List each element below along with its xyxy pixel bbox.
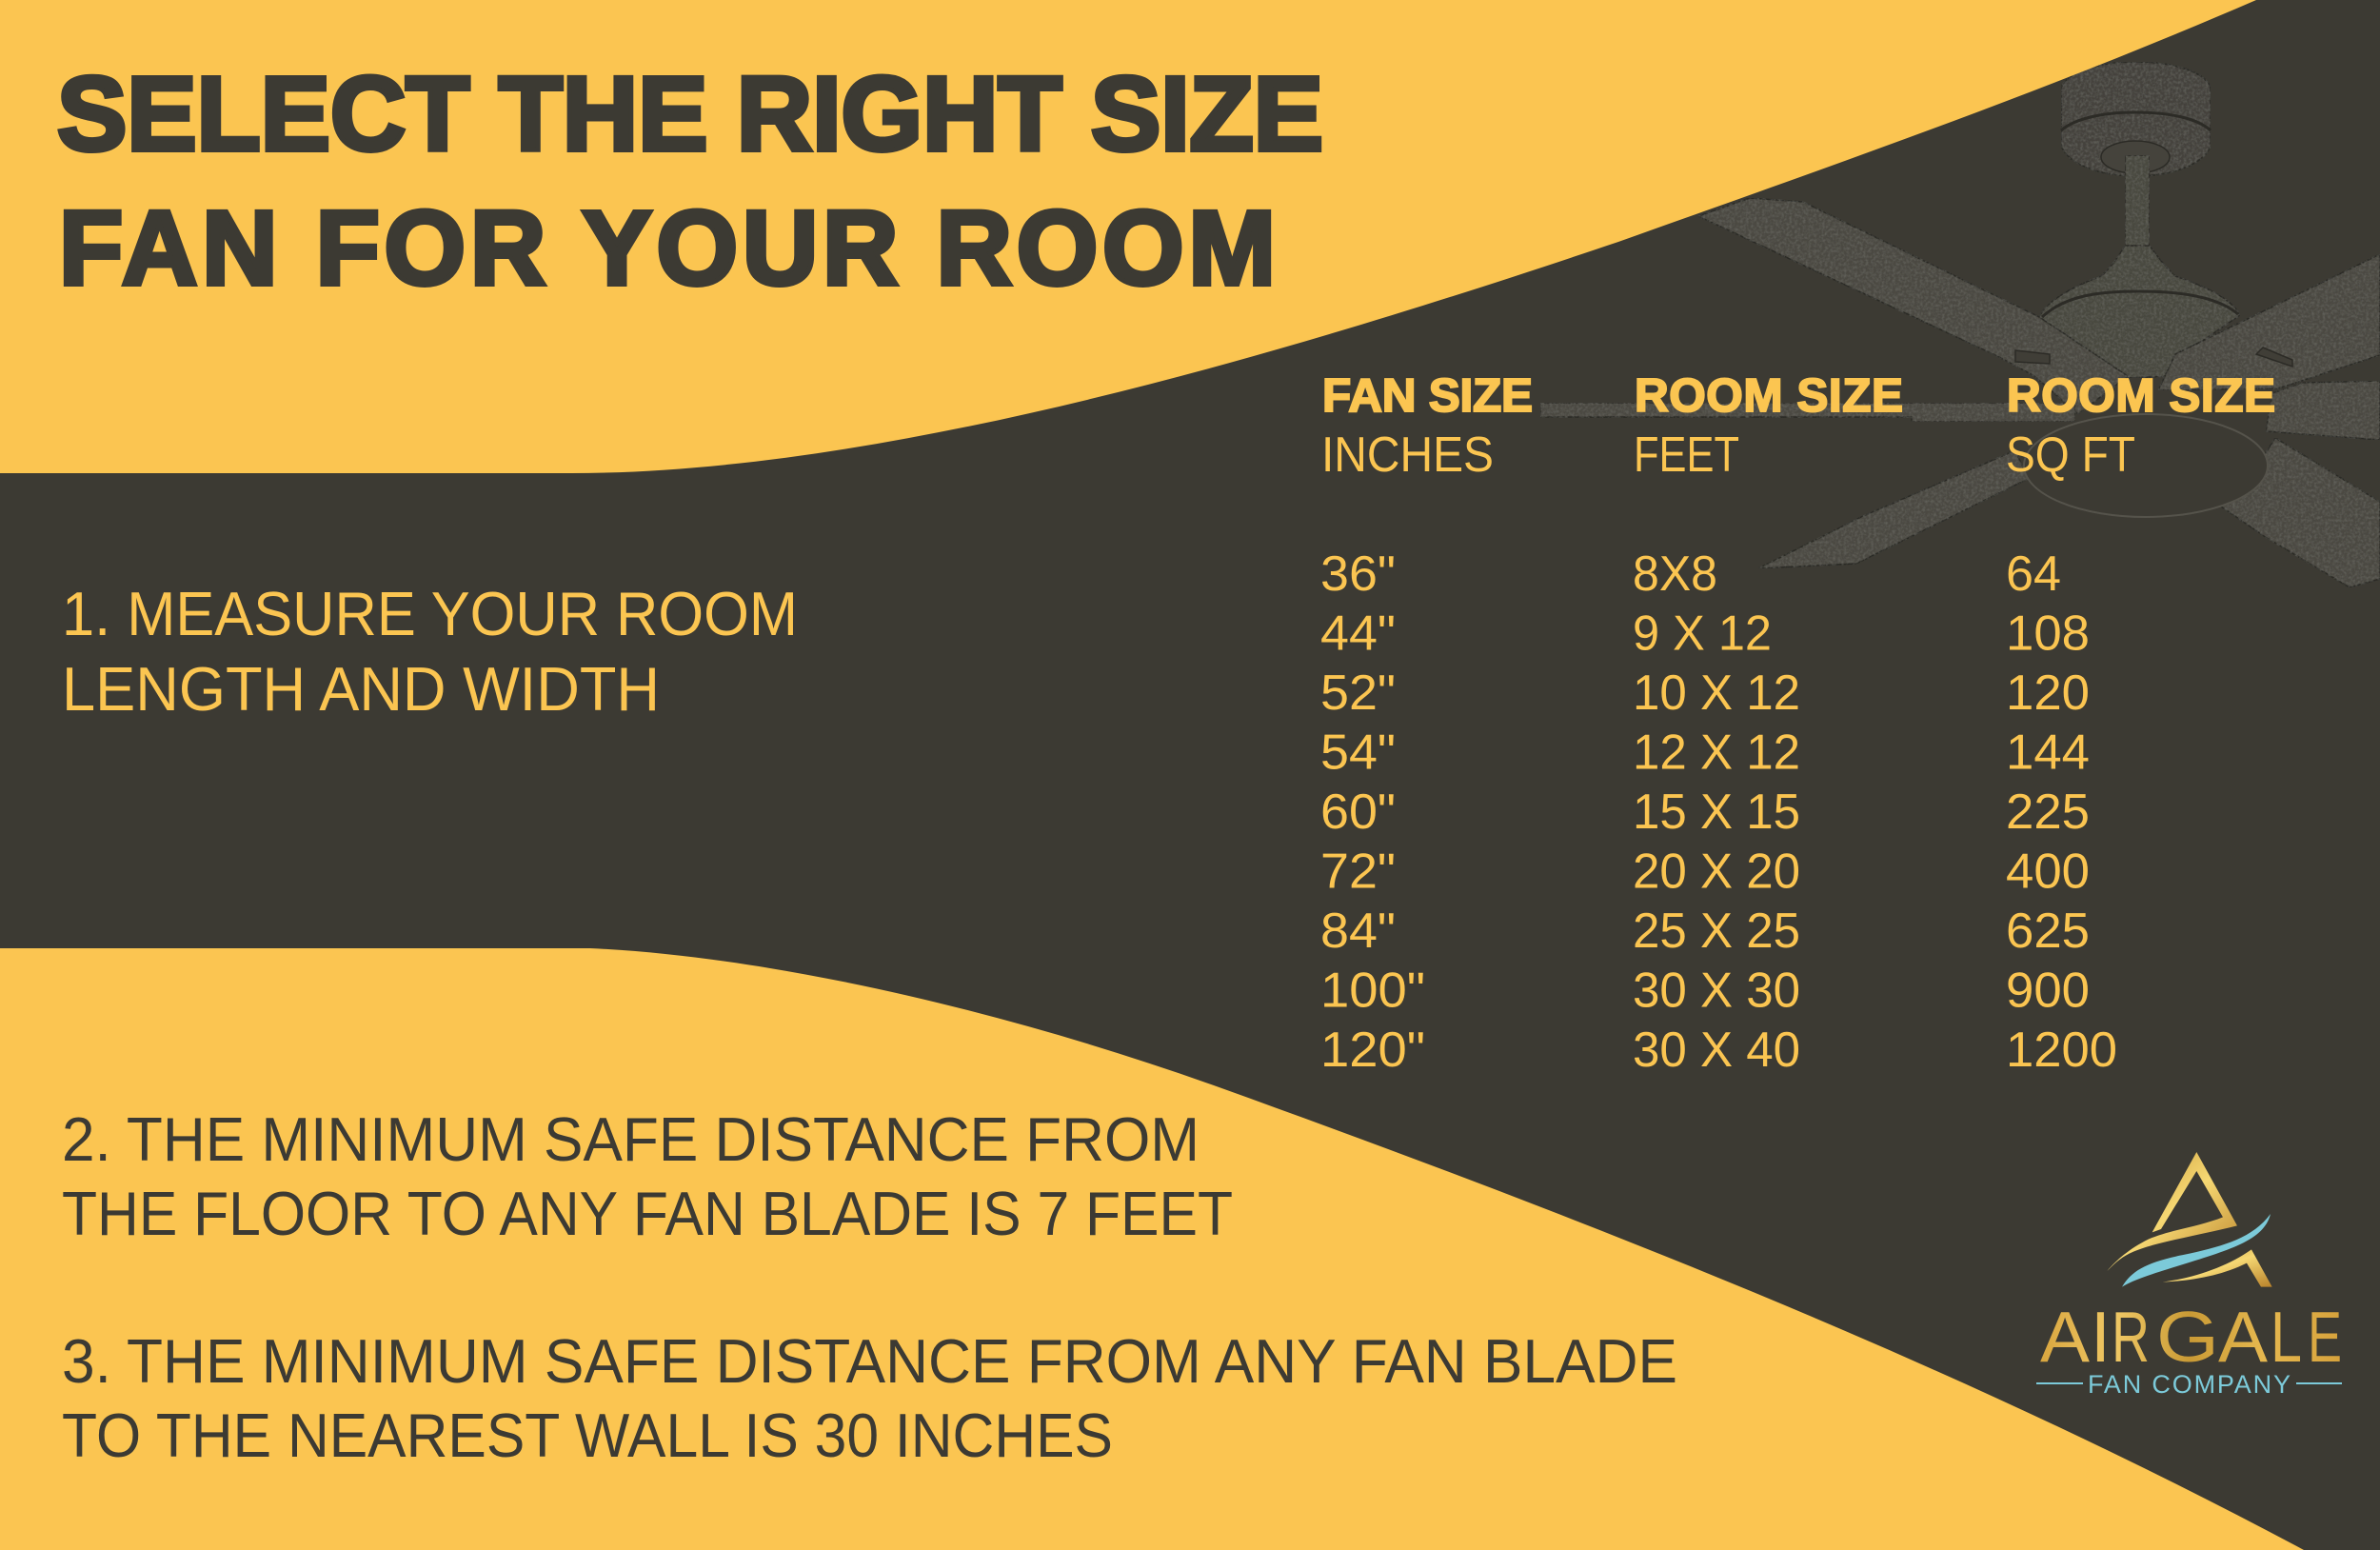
- fan blade: upper left: [1698, 198, 2128, 414]
- column: room size square feet: 400: [2006, 844, 2090, 899]
- fan blade: right horizontal: [2266, 381, 2380, 440]
- column: room size feet: 12 X 12: [1633, 725, 1800, 781]
- column: room size feet: [1633, 369, 1903, 1078]
- column: room size feet: 8X8: [1633, 546, 1717, 602]
- motor band: [2042, 291, 2238, 317]
- logo wordmark: E: [2308, 1297, 2342, 1377]
- fan ceiling canopy: [2061, 62, 2211, 176]
- step 2 text: 2. THE MINIMUM SAFE DISTANCE FROM: [62, 1104, 1200, 1174]
- title: FAN FOR YOUR ROOM: [59, 190, 1276, 307]
- title: [57, 55, 1323, 307]
- column: room size feet: 20 X 20: [1633, 844, 1800, 899]
- column: room size feet: ROOM SIZE: [1635, 369, 1903, 422]
- column: room size square feet: 120: [2006, 666, 2090, 721]
- blade bracket: upper left: [2015, 350, 2050, 364]
- ceiling fan illustration: [1540, 62, 2380, 587]
- logo wordmark: R: [2112, 1297, 2150, 1377]
- sizing table: [1320, 369, 2275, 1078]
- step 2 text: [62, 1104, 1233, 1248]
- logo icon: gold A with swoosh: [2107, 1152, 2272, 1287]
- fan light bowl: [2024, 414, 2268, 517]
- column: room size square feet: 144: [2006, 725, 2090, 781]
- title: SELECT THE RIGHT SIZE: [57, 55, 1323, 173]
- column: room size feet: 10 X 12: [1633, 666, 1800, 721]
- logo wordmark: [2040, 1297, 2342, 1377]
- column: room size square feet: [2006, 369, 2275, 1078]
- logo wordmark: I: [2091, 1297, 2111, 1377]
- column: fan size inches: [1320, 369, 1533, 1078]
- step 3 text: 3. THE MINIMUM SAFE DISTANCE FROM ANY FAN BLADE: [62, 1326, 1677, 1396]
- logo wordmark: G: [2156, 1297, 2219, 1377]
- column: fan size inches: 100": [1320, 964, 1425, 1019]
- column: room size square feet: 225: [2006, 785, 2090, 840]
- column: fan size inches: 36": [1320, 546, 1396, 602]
- column: room size feet: 9 X 12: [1633, 606, 1772, 661]
- column: room size feet: 30 X 40: [1633, 1023, 1800, 1078]
- column: room size square feet: ROOM SIZE: [2007, 369, 2275, 422]
- fan motor housing: [2039, 246, 2240, 378]
- logo tagline: FAN COMPANY: [2088, 1370, 2291, 1399]
- column: fan size inches: 52": [1320, 666, 1396, 721]
- fan blade: left horizontal: [1540, 403, 2075, 422]
- logo wordmark: A: [2040, 1297, 2090, 1377]
- column: fan size inches: INCHES: [1321, 427, 1494, 483]
- step 3 text: TO THE NEAREST WALL IS 30 INCHES: [62, 1401, 1113, 1470]
- column: fan size inches: 120": [1320, 1023, 1425, 1078]
- Airgale Fan Company logo: [2036, 1152, 2342, 1399]
- column: room size square feet: 1200: [2006, 1023, 2117, 1078]
- column: room size feet: 15 X 15: [1633, 785, 1800, 840]
- column: room size feet: 25 X 25: [1633, 904, 1800, 959]
- step 2 text: THE FLOOR TO ANY FAN BLADE IS 7 FEET: [62, 1179, 1233, 1248]
- step 1 text: [62, 579, 798, 724]
- fan downrod: [2125, 155, 2150, 246]
- column: fan size inches: 84": [1320, 904, 1396, 959]
- column: room size square feet: 900: [2006, 964, 2090, 1019]
- column: room size feet: 30 X 30: [1633, 964, 1800, 1019]
- blade bracket: upper right: [2256, 348, 2292, 367]
- column: fan size inches: 60": [1320, 785, 1396, 840]
- fan blade: lower left: [1758, 450, 2028, 568]
- logo wordmark: L: [2271, 1297, 2302, 1377]
- column: room size feet: FEET: [1634, 427, 1739, 483]
- fan blade: lower right: [2221, 438, 2380, 587]
- column: room size square feet: SQ FT: [2006, 427, 2135, 483]
- column: room size square feet: 625: [2006, 904, 2090, 959]
- top yellow swoosh: [0, 0, 2256, 473]
- column: room size square feet: 64: [2006, 546, 2061, 602]
- step 3 text: [62, 1326, 1677, 1470]
- step 1 text: LENGTH AND WIDTH: [62, 654, 660, 724]
- column: fan size inches: 72": [1320, 844, 1396, 899]
- column: fan size inches: 44": [1320, 606, 1396, 661]
- step 1 text: 1. MEASURE YOUR ROOM: [62, 579, 798, 648]
- fan blade: upper right: [2158, 254, 2380, 390]
- column: fan size inches: FAN SIZE: [1322, 369, 1533, 422]
- logo wordmark: A: [2218, 1297, 2268, 1377]
- column: fan size inches: 54": [1320, 725, 1396, 781]
- column: room size square feet: 108: [2006, 606, 2090, 661]
- canopy collar: [2101, 141, 2170, 173]
- bottom yellow swoosh: [0, 948, 2304, 1550]
- canopy band: [2061, 112, 2211, 130]
